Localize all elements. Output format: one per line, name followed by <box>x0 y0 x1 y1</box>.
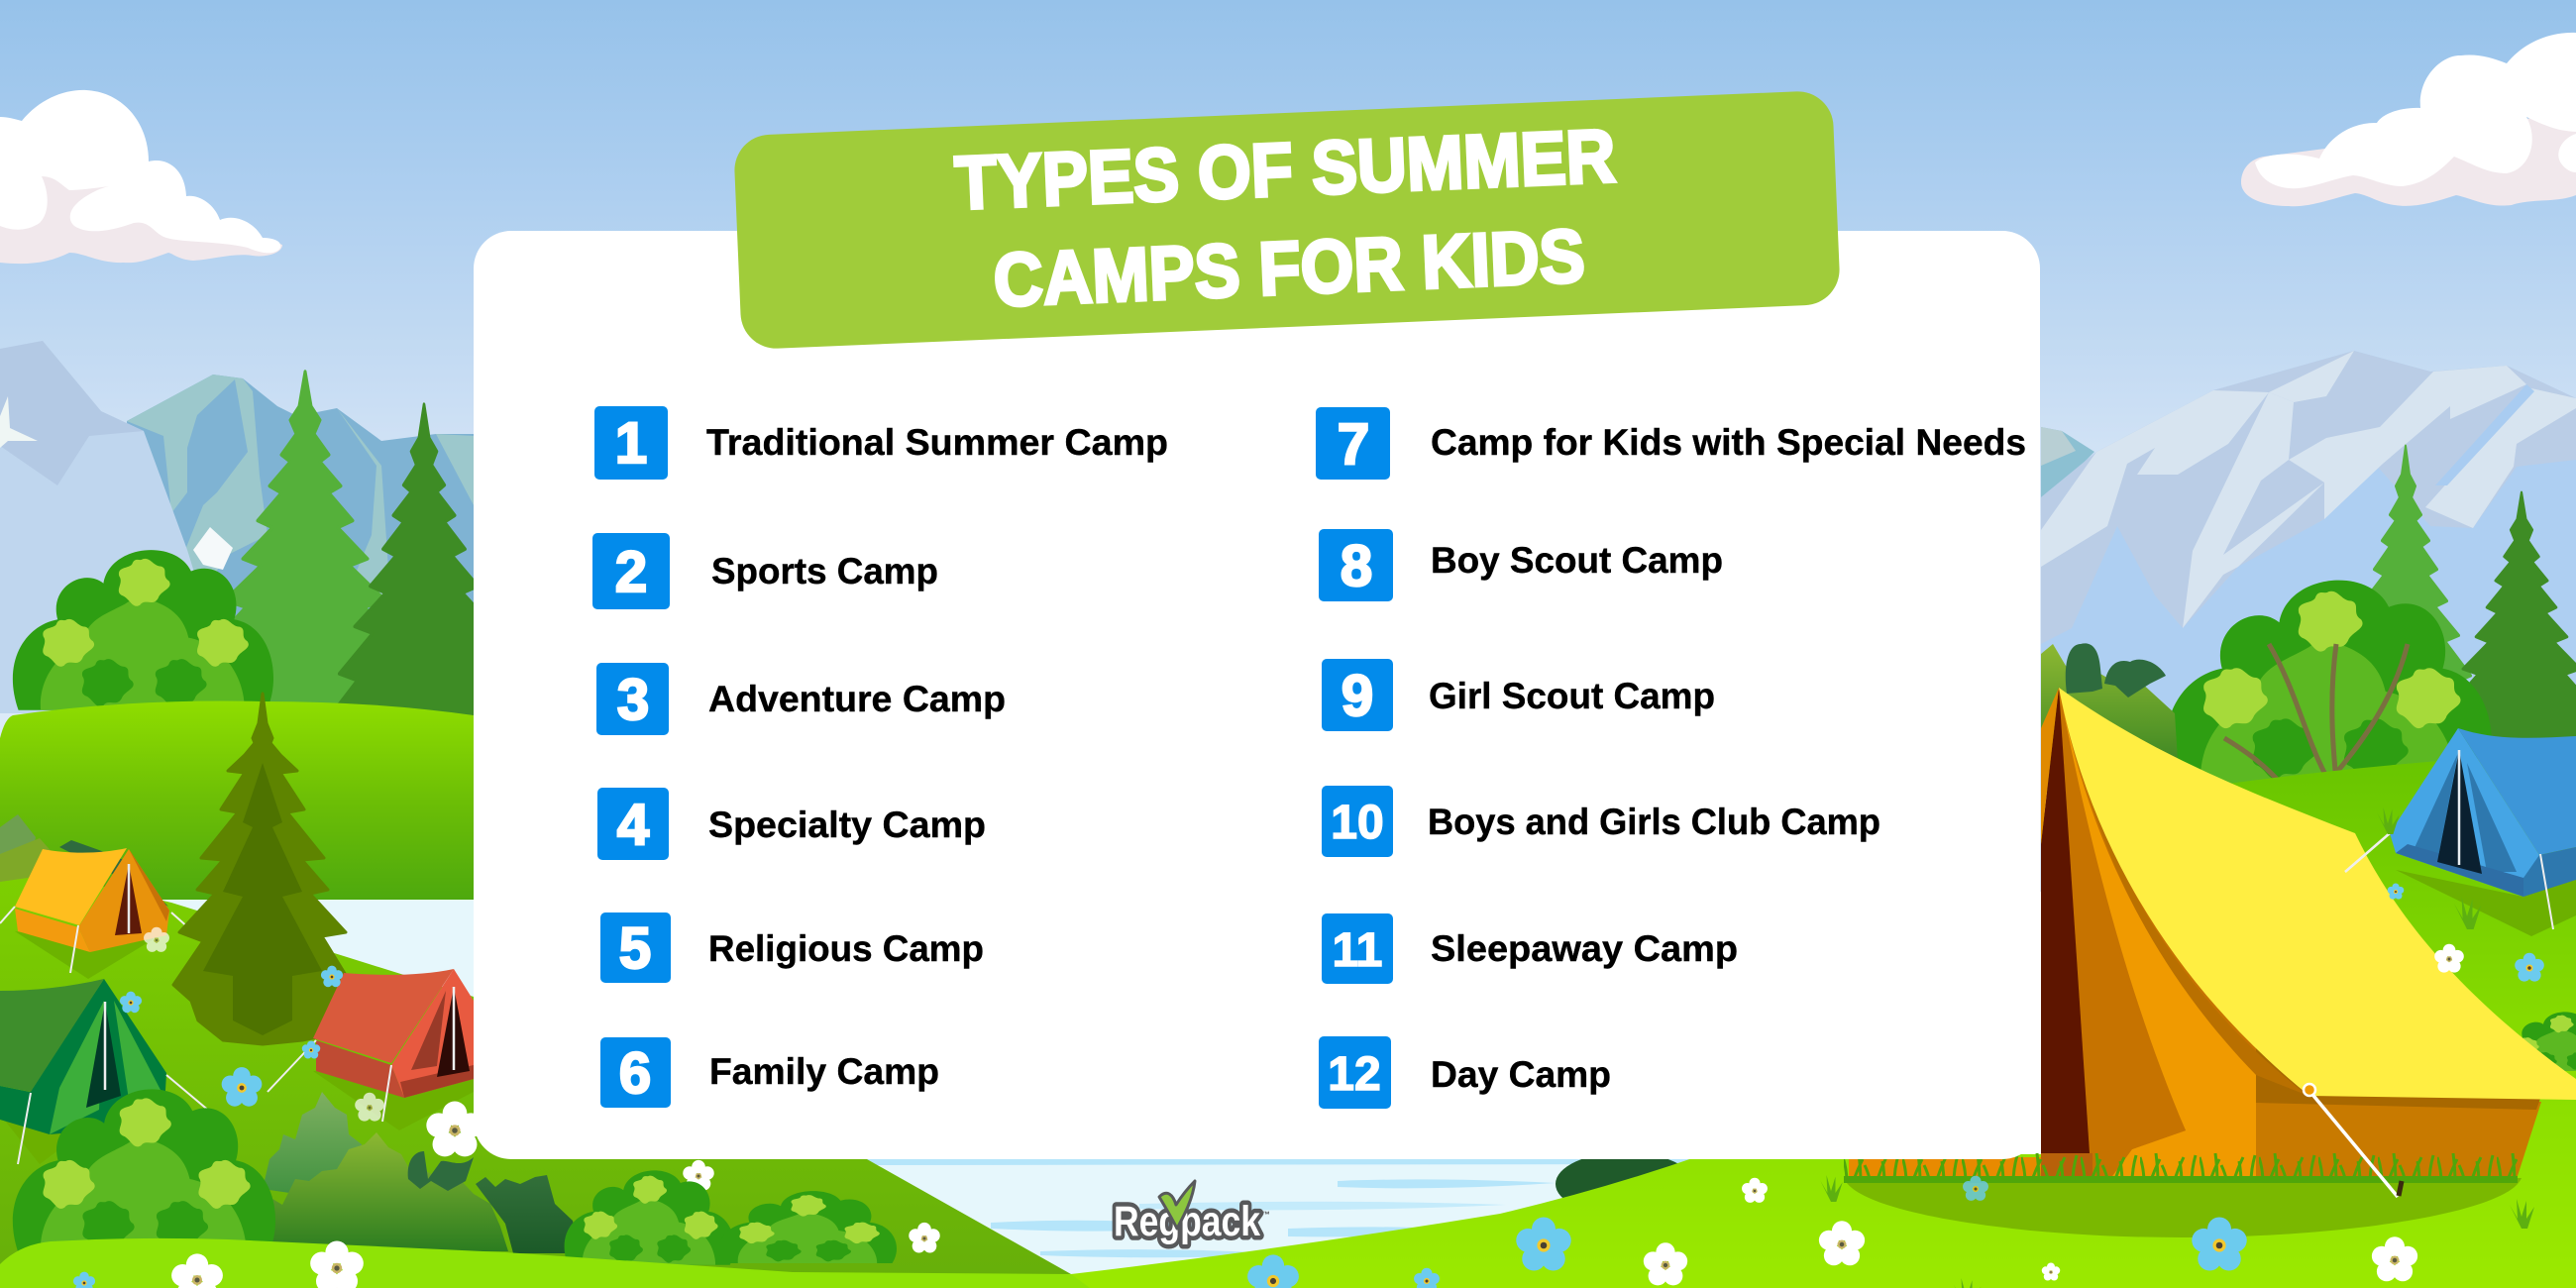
bush: right with branches <box>2166 581 2492 803</box>
lake <box>159 900 1704 1288</box>
item 4: 4 <box>617 793 649 857</box>
item 6: 6 <box>619 1041 651 1106</box>
item 9: 9 <box>1342 664 1373 728</box>
tent: side wall <box>2251 1102 2541 1179</box>
foreground lawn: left <box>0 1238 1090 1288</box>
item 8 <box>1319 529 1723 601</box>
bush behind big tent <box>2502 1012 2576 1071</box>
tent: door <box>2041 688 2090 1153</box>
bush: bottom center 1 <box>565 1170 734 1265</box>
item 12: Day Camp <box>1431 1054 1611 1095</box>
item 5: 5 <box>619 916 651 981</box>
mountain: teal peak <box>2041 427 2094 505</box>
mountains: right <box>2041 351 2576 793</box>
tent: rear base <box>1849 1157 2047 1181</box>
sky background <box>0 0 2576 892</box>
tent: orange panel <box>2059 688 2186 1153</box>
item 3: 3 <box>617 668 649 732</box>
tree: olive pine <box>173 694 352 1044</box>
tent: orange <box>0 848 199 979</box>
item 4: Specialty Camp <box>708 805 986 845</box>
item 11 <box>1322 913 1738 984</box>
item 7 <box>1316 407 2026 480</box>
tent: roof <box>2059 688 2576 1100</box>
banner background <box>733 90 1841 350</box>
mountain: grey face <box>2041 351 2576 644</box>
flowers: left lawn <box>120 927 940 1252</box>
item 10 <box>1322 786 1880 857</box>
mountain: pale blue peak <box>0 341 238 713</box>
olive bush behind big tent <box>2041 644 2180 793</box>
item 2 <box>592 533 938 609</box>
item 4 <box>597 788 986 860</box>
bush: bottom left large <box>13 1089 275 1253</box>
cloud: right <box>2241 33 2576 206</box>
tent: grass strip <box>1844 1149 2518 1183</box>
mountain: teal ridge <box>127 375 474 713</box>
bush: top left <box>13 550 273 710</box>
mountain: range base <box>2041 351 2576 793</box>
small background tree by orange tent <box>0 814 168 907</box>
tree: right light spruce <box>2326 446 2485 734</box>
item 8: Boy Scout Camp <box>1431 540 1723 581</box>
item 10: Boys and Girls Club Camp <box>1428 802 1880 842</box>
list: left column <box>592 406 1168 1108</box>
item 1: 1 <box>615 411 647 476</box>
item 10: 10 <box>1331 797 1384 849</box>
left hill <box>0 701 654 903</box>
item 9 <box>1322 659 1715 731</box>
panel: white card <box>474 231 2040 1159</box>
dark shrub: far shore <box>1556 1152 1694 1216</box>
tree: right dark spruce <box>2434 492 2576 761</box>
tree: dark spruce <box>321 404 527 743</box>
item 1: Traditional Summer Camp <box>706 422 1168 463</box>
item 6 <box>600 1037 939 1108</box>
item 7: 7 <box>1338 412 1369 477</box>
logo trademark: ™ <box>1261 1210 1270 1220</box>
tent: green <box>0 979 210 1164</box>
big yellow tent <box>1844 688 2576 1237</box>
item 2: 2 <box>615 540 647 604</box>
bushes: gradient background shrubs <box>253 1092 580 1253</box>
item 11: Sleepaway Camp <box>1431 928 1738 969</box>
tent: rope front <box>2304 1084 2402 1197</box>
tent: shadow <box>1844 1178 2522 1237</box>
title line 1: TYPES OF SUMMER <box>953 114 1617 226</box>
item 1 <box>594 406 1168 480</box>
item 8: 8 <box>1341 534 1372 598</box>
item 7: Camp for Kids with Special Needs <box>1431 422 2026 463</box>
item 11: 11 <box>1333 924 1382 977</box>
lawn: right <box>1071 753 2576 1288</box>
tent: light flap <box>2059 688 2256 1179</box>
title line 2: CAMPS FOR KIDS <box>992 214 1586 323</box>
item 6: Family Camp <box>709 1051 939 1092</box>
tent: red <box>268 969 474 1130</box>
tent: rope back <box>2345 833 2390 872</box>
tree: light spruce <box>186 372 424 720</box>
item 2: Sports Camp <box>711 551 938 591</box>
dark shrubs behind big tent <box>2066 643 2166 698</box>
tent: shaded strip <box>2066 694 2308 1096</box>
logo: Regpack <box>1114 1181 1270 1245</box>
logo checkmark <box>1159 1181 1195 1229</box>
tent: blue <box>2345 728 2576 936</box>
grass tufts and flowers: right lawn <box>73 807 2544 1288</box>
bush: bottom center 2 <box>719 1191 897 1263</box>
logo wordmark: Regpack <box>1114 1198 1260 1245</box>
cloud: left <box>0 90 282 264</box>
mountain: light facets <box>2041 390 2269 567</box>
item 3: Adventure Camp <box>708 679 1006 719</box>
tent: front base <box>2041 688 2318 1179</box>
item 12: 12 <box>1328 1048 1381 1101</box>
lawn: left <box>0 862 1071 1288</box>
item 5: Religious Camp <box>708 928 984 969</box>
item 9: Girl Scout Camp <box>1429 676 1715 716</box>
item 5 <box>600 912 984 983</box>
item 12 <box>1319 1036 1611 1109</box>
list: right column <box>1316 407 2026 1109</box>
title banner <box>733 90 1841 350</box>
item 3 <box>596 663 1006 735</box>
mountains: left <box>0 341 474 713</box>
